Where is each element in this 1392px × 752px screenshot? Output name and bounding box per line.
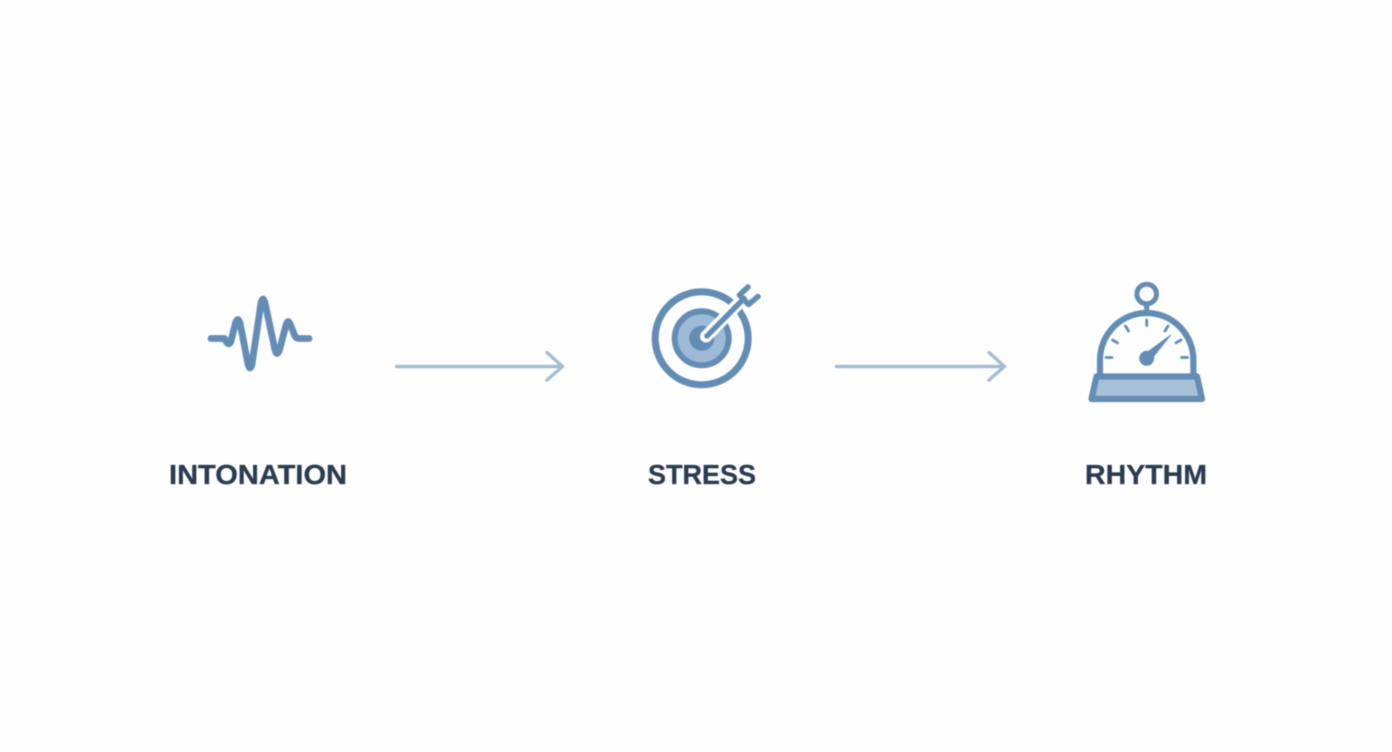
label: stress: STRESS — [648, 459, 756, 490]
arrow: intonation to stress — [396, 352, 562, 380]
icon: stress target — [655, 287, 758, 385]
icon: intonation waveform — [211, 299, 309, 368]
icon: rhythm metronome gauge — [1092, 284, 1202, 399]
label: intonation: INTONATION — [169, 459, 347, 490]
arrow: stress to rhythm — [836, 352, 1004, 380]
label: rhythm: RHYTHM — [1085, 459, 1207, 490]
